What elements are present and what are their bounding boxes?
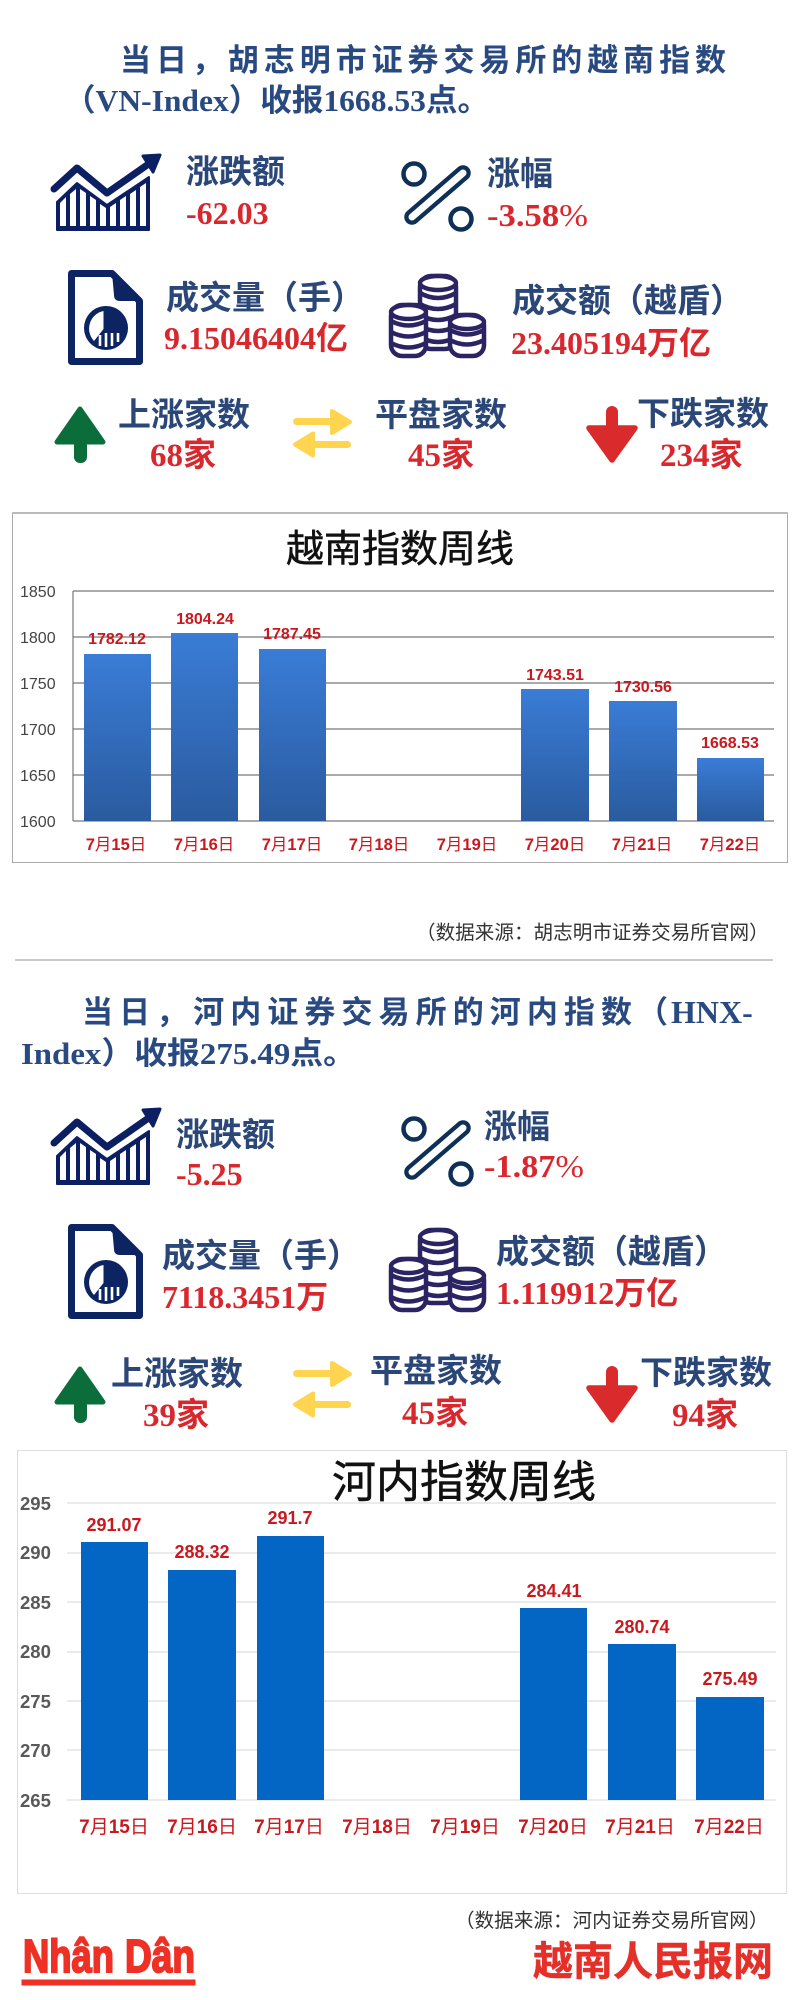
logo: Nhan Dan [22,1930,195,1985]
x axis labels: 7月15日 [86,836,146,854]
stat: change percent: -3.58% [487,197,588,233]
stat: decliners: 234家 [660,437,742,474]
stat: advancers: 68家 [150,437,216,474]
stat: decliners [640,1355,772,1434]
bar value labels: 280.74 [614,1617,670,1637]
x axis labels: 7月19日 [430,1817,500,1838]
stat: decliners: 下跌家数 [640,1355,772,1392]
title: VN-Index summary: （VN-Index）收报1668.53点。 [64,83,489,118]
title: VN-Index summary [64,43,726,118]
stat: unchanged: 45家 [402,1395,468,1432]
icon: coin stacks [391,1230,484,1310]
x axis labels: 7月16日 [167,1817,237,1838]
x axis labels: 7月19日 [437,836,497,854]
stat: unchanged: 平盘家数 [370,1353,502,1390]
stat: turnover: 成交额（越盾） [496,1234,727,1271]
y axis labels: 1700 [20,722,56,739]
y axis labels: 1850 [20,584,56,601]
title: HNX-Index summary: （ [637,995,668,1030]
bar value labels: 284.41 [526,1581,582,1601]
source note: HNX: （数据来源：河内证券交易所官网） [455,1910,768,1932]
stat: advancers [111,1356,243,1434]
chart title: 河内指数周线 [332,1458,596,1507]
x axis labels: 7月18日 [342,1817,412,1838]
y axis labels: 265 [20,1790,51,1811]
stat: decliners [637,396,769,474]
stat: unchanged [375,397,507,474]
y axis labels: 1650 [20,768,56,785]
stat: turnover: 23.405194万亿 [511,325,711,361]
stat: advancers [118,397,250,474]
bar value labels [88,611,759,752]
title: HNX-Index summary [21,994,753,1071]
bar value labels: 1730.56 [614,679,672,696]
x axis labels [86,836,760,854]
stat: unchanged: 平盘家数 [375,397,507,434]
grid [67,1503,776,1800]
stat: change percent: 涨幅 [484,1109,550,1146]
x axis labels: 7月21日 [605,1817,675,1838]
y axis labels: 290 [20,1542,51,1563]
x axis labels: 7月18日 [349,836,409,854]
stat: change percent: -1.87% [484,1148,584,1184]
x axis labels: 7月15日 [79,1817,149,1838]
stat: change percent [487,156,588,233]
y axis labels: 280 [20,1641,51,1662]
brand: People's Daily Vietnam: 越南人民报网 [533,1940,773,1984]
stat: volume: 成交量（手） [166,280,364,317]
stat: advancers: 39家 [143,1397,209,1434]
stat: change amount: 涨跌额 [176,1117,275,1154]
icon: red down arrow [589,406,635,460]
stat: unchanged [370,1353,502,1432]
stat: turnover [496,1234,727,1311]
y axis labels: 270 [20,1740,51,1761]
stat: volume: 成交量（手） [162,1238,360,1275]
stat: turnover [511,283,743,361]
stat: turnover: 1.119912万亿 [496,1275,678,1311]
icon: rising chart [54,155,160,230]
bar value labels: 1782.12 [88,631,146,648]
stat: change amount [186,154,285,231]
y axis labels: 285 [20,1592,51,1613]
stat: decliners: 94家 [672,1397,738,1434]
x axis labels: 7月22日 [700,836,760,854]
bars [81,1536,764,1800]
chart title: 越南指数周线 [286,529,514,571]
x axis labels: 7月21日 [612,836,672,854]
logo: Nhan Dan: Dân [125,1930,195,1982]
stat: change amount: 涨跌额 [186,154,285,191]
stat: change percent [484,1109,584,1184]
source note: HOSE: （数据来源：胡志明市证券交易所官网） [416,922,769,944]
stat: volume: 9.15046404亿 [164,320,348,356]
grid and axis [73,591,774,821]
x axis labels: 7月20日 [525,836,585,854]
stat: advancers: 上涨家数 [118,397,250,434]
icon: red down arrow [589,1366,635,1420]
panel: VN-Index weekly chart [12,513,788,862]
title: VN-Index summary: 当日，胡志明市证券交易所的越南指数 [120,43,726,78]
icon: rising chart [54,1109,160,1184]
icon: document with pie chart [72,273,140,362]
stat: volume: 7118.3451万 [162,1279,328,1315]
bar value labels: 1668.53 [701,735,759,752]
logo: Nhan Dan: Nhân [23,1930,114,1982]
stat: change amount [176,1117,275,1192]
bar value labels: 291.07 [86,1515,142,1535]
bar value labels: 1743.51 [526,667,584,684]
icon: percent [404,164,472,230]
stat: change amount: -5.25 [176,1156,243,1192]
y axis labels [20,584,56,831]
y axis labels: 275 [20,1691,51,1712]
stat: volume [162,1238,360,1315]
x axis labels: 7月22日 [694,1817,764,1838]
icon: percent [404,1118,472,1184]
x axis labels: 7月17日 [254,1817,324,1838]
stat: change amount: -62.03 [186,195,269,231]
y axis labels: 1600 [20,814,56,831]
stat: turnover: 成交额（越盾） [512,283,743,320]
y axis labels: 1750 [20,676,56,693]
x axis labels: 7月17日 [262,836,322,854]
icon: document with pie chart [72,1227,140,1316]
y axis labels: 1800 [20,630,56,647]
title: HNX-Index summary: 当日，河内证券交易所的河内指数 [82,995,632,1030]
icon: coin stacks [391,276,484,356]
y axis labels [20,1493,51,1811]
title: HNX-Index summary: HNX- [671,994,753,1030]
bar value labels: 288.32 [174,1542,230,1562]
panel: HNX-Index weekly chart [18,1450,786,1894]
y axis labels: 295 [20,1493,51,1514]
bar value labels: 291.7 [267,1508,313,1528]
stat: advancers: 上涨家数 [111,1356,243,1393]
x axis labels: 7月16日 [174,836,234,854]
x axis labels: 7月20日 [518,1817,588,1838]
bar value labels [86,1508,758,1689]
bar value labels: 275.49 [702,1669,758,1689]
icon: yellow exchange arrows [293,1363,351,1416]
stat: decliners: 下跌家数 [637,396,769,433]
bar value labels: 1804.24 [176,611,234,628]
x axis labels [79,1817,764,1838]
title: HNX-Index summary: Index）收报275.49点。 [21,1036,356,1071]
icon: green up arrow [57,1369,103,1423]
stat: unchanged: 45家 [408,437,474,474]
stat: volume [164,280,364,356]
icon: yellow exchange arrows [293,411,351,456]
bar value labels: 1787.45 [263,626,321,643]
stat: change percent: 涨幅 [487,156,553,193]
bars [84,633,764,821]
icon: green up arrow [57,409,103,463]
